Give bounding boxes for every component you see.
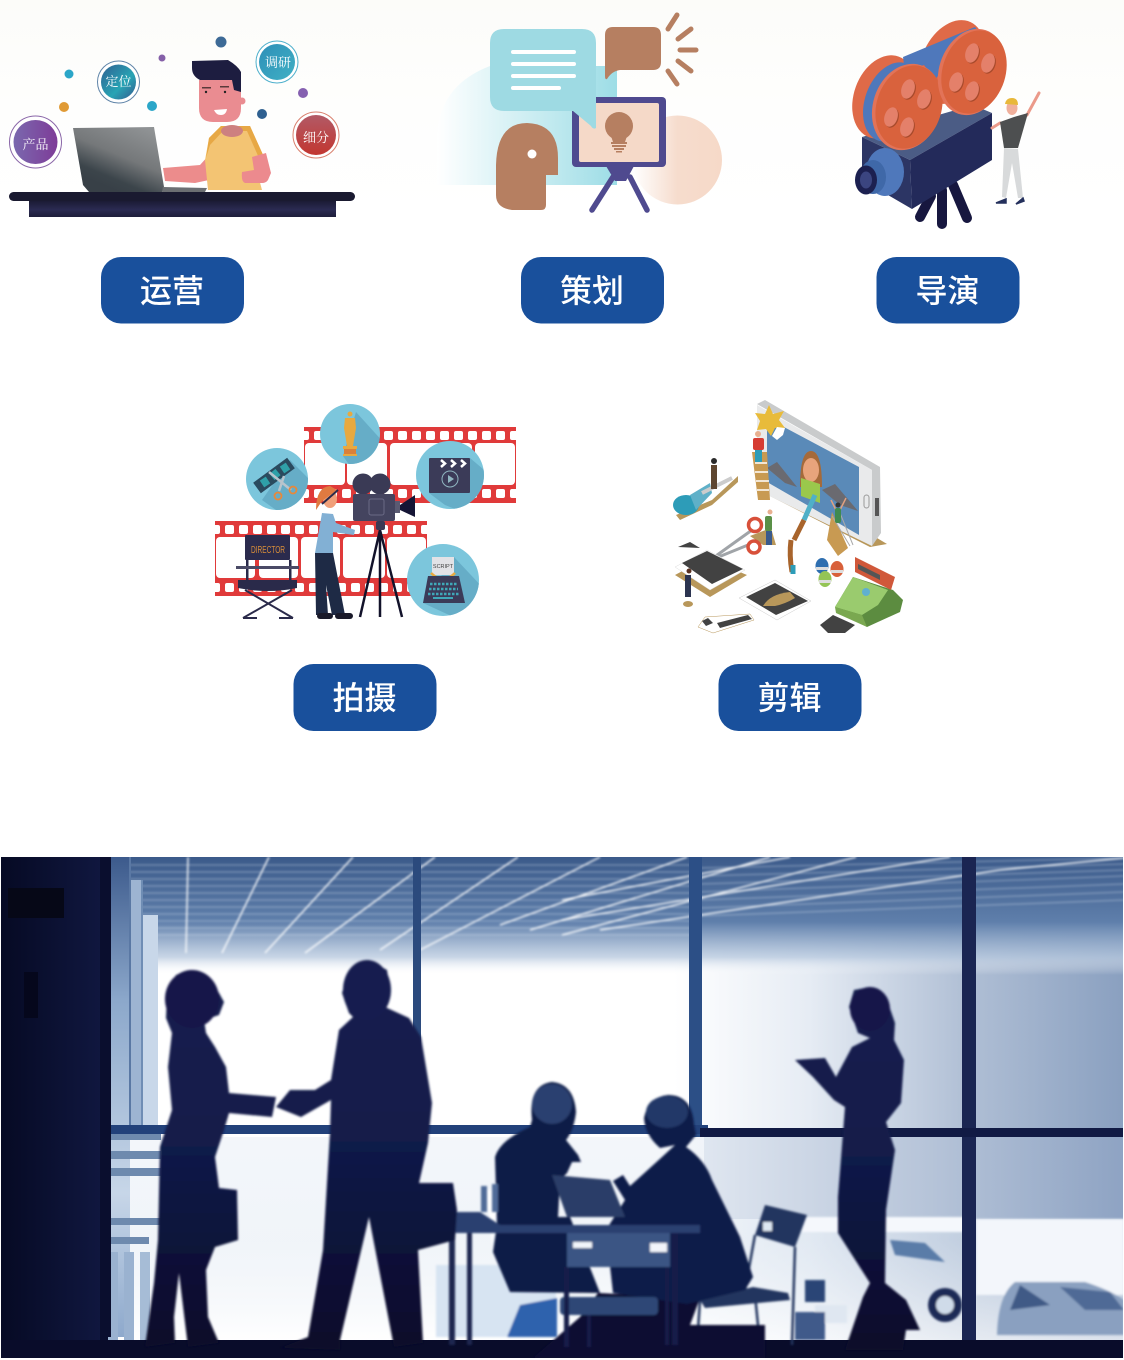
worker figure: [992, 93, 1039, 204]
button: director: 导演: [915, 273, 980, 309]
presentation board: [572, 97, 666, 210]
lower dark legs: [533, 1293, 765, 1358]
instant camera: [835, 557, 903, 627]
table: [436, 1212, 700, 1345]
red worker on ladder: [752, 431, 770, 500]
head profile: [496, 123, 558, 210]
brush with worker: [790, 495, 815, 574]
teal speech bubble: [490, 29, 596, 129]
director chair: [236, 535, 299, 618]
man shaking hands: [276, 960, 457, 1350]
photo scraps: [698, 612, 860, 634]
brown speech bubble: [605, 27, 661, 79]
icon: editing isometric scene: [673, 400, 903, 634]
laptop: [73, 127, 207, 192]
bubble: positioning: 定位: [105, 74, 132, 89]
button: shooting: [294, 664, 436, 731]
top faint background band: [0, 0, 1124, 215]
window wall background: [718, 932, 1123, 1340]
laptop: [552, 1175, 625, 1217]
peach circle: [633, 116, 722, 204]
dark left wall: [1, 857, 111, 1358]
film reels: [841, 9, 1017, 159]
circle: statuette: [320, 404, 380, 464]
person: [163, 60, 271, 190]
tape dispenser with worker: [673, 458, 738, 520]
ceiling: [108, 857, 1124, 975]
lower window tint: [108, 1137, 1124, 1342]
standing woman with notebook: [795, 987, 920, 1350]
photo sheet with cut-out: [739, 580, 811, 620]
button: planning: 策划: [560, 273, 624, 309]
button: director: [876, 257, 1020, 324]
photo sheet with navy worker: [675, 542, 747, 607]
circle: film and scissors: [246, 448, 308, 510]
phone base shadow: [766, 484, 887, 547]
seated man: [493, 1082, 600, 1293]
icon: shooting film set: [215, 404, 516, 620]
ray lines: [668, 15, 696, 84]
bubble: product: [10, 116, 62, 168]
scissors with green worker: [713, 510, 776, 558]
teal hill: [437, 66, 617, 185]
seated heads highlight: [532, 1084, 688, 1128]
circle: clapperboard: [416, 441, 484, 509]
chair right: [697, 1205, 807, 1345]
button: operations: 运营: [140, 273, 204, 309]
icon: director film camera: [841, 9, 1039, 224]
button: editing: 剪辑: [757, 680, 822, 716]
button: editing: [718, 664, 862, 731]
movie camera with tripod: [352, 474, 415, 617]
icon: planning speech bubbles and board: [437, 15, 722, 210]
lens: [855, 148, 904, 196]
seated woman: [606, 1095, 753, 1304]
window mullions: [108, 857, 1124, 1347]
film strip upper: [304, 427, 516, 503]
camera operator: [315, 486, 355, 619]
icon: operations person at laptop: [9, 36, 355, 217]
left lower bars: [107, 1133, 161, 1342]
film strip lower: [215, 521, 427, 596]
camera body: [862, 105, 992, 209]
circle: typewriter: [407, 544, 479, 616]
phone: [757, 400, 881, 546]
silhouettes group: [145, 960, 920, 1358]
woman shaking hands: [145, 970, 276, 1347]
photo: business meeting silhouettes: [1, 857, 1124, 1358]
bubble: product: 产品: [22, 137, 49, 152]
yellow and white bursts: [755, 405, 785, 440]
glasses on table: [481, 1184, 498, 1212]
second ladder with green figure: [827, 498, 853, 556]
left glass columns: [108, 857, 158, 1337]
light bulb: [605, 112, 633, 152]
outside buildings and cars: [436, 1190, 1124, 1340]
button: operations: [101, 257, 244, 324]
button: planning: [521, 257, 664, 324]
director chair: DIRECTOR: [251, 545, 285, 556]
floating dots: [59, 36, 308, 119]
bubble: research: [256, 41, 298, 83]
floor: [1, 1340, 1123, 1358]
bubble: research: 调研: [265, 55, 291, 70]
front chair: [560, 1233, 670, 1347]
camera legs: [920, 185, 967, 224]
lower right grey window: [704, 1137, 1124, 1219]
bubble: segmentation: 细分: [303, 130, 329, 145]
bubble: positioning: [98, 61, 140, 103]
button: shooting: 拍摄: [332, 680, 397, 716]
circle: typewriter: SCRIPT: [433, 564, 454, 570]
bubble: segmentation: [293, 112, 339, 158]
desk: [9, 192, 355, 217]
paint cans: [816, 558, 844, 587]
